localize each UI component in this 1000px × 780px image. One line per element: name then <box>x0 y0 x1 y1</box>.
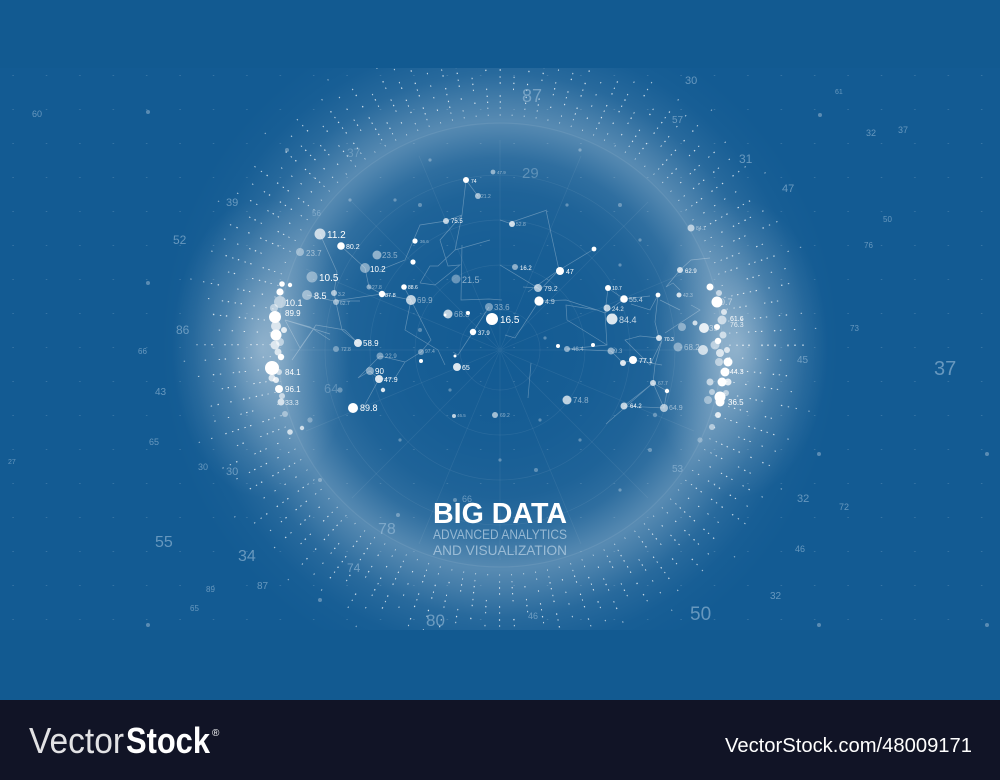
data labels: bright: 10.5 <box>319 273 339 284</box>
brand logo: Vector <box>29 720 124 761</box>
data labels: bright: 10.1 <box>285 298 303 308</box>
data labels: bright: 16.5 <box>500 315 520 326</box>
data labels: bright: 8.5 <box>314 291 327 301</box>
data labels: faint: 22.9 <box>385 354 397 360</box>
data labels: faint: 72.8 <box>341 347 351 353</box>
background numbers: 89 <box>206 585 215 594</box>
right edge cluster <box>704 284 732 430</box>
data labels: faint: 46.4 <box>572 347 584 353</box>
data labels: bright: 36.5 <box>728 398 744 407</box>
data labels: faint: 52.8 <box>516 222 526 228</box>
data nodes: bright <box>337 177 669 413</box>
background numbers: 29 <box>522 165 539 182</box>
data labels: faint: 69.2 <box>500 413 510 419</box>
background numbers: 65 <box>190 604 199 613</box>
data labels: bright: 20.7 <box>715 297 733 307</box>
background numbers: 37 <box>898 125 908 135</box>
background numbers: 43 <box>155 387 167 398</box>
data labels: bright: 70.3 <box>664 337 674 343</box>
data labels: bright: 33.3 <box>285 400 299 407</box>
background numbers: 60 <box>32 109 42 119</box>
footer bar <box>0 700 1000 780</box>
data labels: faint: 84.1 <box>696 226 706 232</box>
scattered faint dots <box>146 110 989 627</box>
background numbers: 66 <box>138 347 147 356</box>
background numbers: 34 <box>238 548 256 565</box>
background numbers: 30 <box>198 462 208 472</box>
background numbers: 50 <box>883 215 892 224</box>
data labels: bright: 4.9 <box>545 299 555 306</box>
data nodes: pale <box>296 170 709 418</box>
background numbers: 45 <box>797 355 809 366</box>
data labels: bright: 16.2 <box>520 266 532 272</box>
data labels: faint: 68.8 <box>454 310 470 319</box>
background numbers: 57 <box>672 115 684 126</box>
data labels: bright: 24.2 <box>612 307 624 313</box>
heading: big data: BIG DATA <box>433 498 567 530</box>
background numbers: 53 <box>672 464 684 475</box>
data labels: bright: 10.2 <box>370 265 386 274</box>
data labels: bright: 90 <box>375 367 384 376</box>
data labels: faint: 62.7 <box>340 301 350 307</box>
background numbers: 56 <box>312 209 321 218</box>
background numbers: 52 <box>173 233 187 247</box>
data labels: bright: 64.2 <box>630 404 642 410</box>
background numbers: 74 <box>347 561 361 575</box>
data labels: faint: 46.5 <box>457 413 466 418</box>
data labels: faint: 97.4 <box>425 349 435 355</box>
data labels: faint <box>306 170 718 419</box>
data labels: bright: 65 <box>462 365 470 372</box>
background numbers: 50 <box>690 604 711 625</box>
background numbers: 65 <box>149 437 159 447</box>
title block <box>433 502 566 555</box>
data labels: faint: 64.9 <box>669 405 683 412</box>
data labels: bright: 61.6 <box>730 316 744 323</box>
background numbers: 37 <box>347 146 361 160</box>
background numbers: 37 <box>934 358 956 380</box>
data labels: faint: 21.5 <box>462 275 480 285</box>
background numbers: 46 <box>528 611 538 621</box>
data labels: faint: 3.2 <box>338 292 345 298</box>
data labels: bright: 62.9 <box>685 269 697 275</box>
data labels: bright: 89.8 <box>360 403 378 413</box>
network links <box>285 180 710 424</box>
background numbers: 32 <box>866 128 876 138</box>
background numbers: 72 <box>839 502 849 512</box>
data labels: bright: 84.4 <box>619 315 637 325</box>
background numbers: 73 <box>850 324 859 333</box>
brand logo: Stock <box>126 720 211 761</box>
data labels: faint: 21.2 <box>481 194 491 200</box>
data labels: faint: 67.7 <box>658 381 668 387</box>
data labels: bright: 47.9 <box>384 377 398 384</box>
data labels: faint: 68.2 <box>684 343 700 352</box>
data labels: bright: 10.7 <box>612 286 622 292</box>
data labels: faint: 33.6 <box>494 303 510 312</box>
data labels: faint: 23.7 <box>306 249 322 258</box>
data labels: bright: 55.4 <box>629 297 643 304</box>
background numbers: 27 <box>8 459 16 466</box>
background numbers: 31 <box>739 152 753 166</box>
background numbers: 55 <box>155 534 173 551</box>
data labels: bright: 58.9 <box>363 339 379 348</box>
background numbers: 30 <box>226 466 238 478</box>
left edge cluster <box>265 281 304 435</box>
background numbers: 47 <box>782 183 794 195</box>
subtitle line 2: AND VISUALIZATION <box>433 542 567 558</box>
data labels: bright: 80.2 <box>346 244 360 251</box>
background numbers: 32 <box>797 493 809 505</box>
data labels: faint: 23.5 <box>382 251 398 260</box>
data labels: faint: 27.8 <box>372 285 382 291</box>
data labels: faint: 36.6 <box>420 239 429 244</box>
data labels: faint: 69.9 <box>417 296 433 305</box>
background numbers: 30 <box>685 75 697 87</box>
data labels: bright <box>285 179 744 413</box>
background numbers <box>8 75 956 630</box>
background numbers: 87 <box>522 86 542 106</box>
data labels: bright: 44.3 <box>730 369 744 376</box>
background numbers: 80 <box>426 611 445 630</box>
background numbers: 61 <box>835 89 843 96</box>
data labels: faint: 47.9 <box>497 170 506 175</box>
data labels: faint: 74.8 <box>573 396 589 405</box>
background numbers: 46 <box>795 544 805 554</box>
brand logo: ® <box>212 728 220 739</box>
data labels: faint: 35 <box>709 324 718 333</box>
background numbers: 66 <box>462 494 472 504</box>
background numbers: 32 <box>770 591 782 602</box>
data labels: bright: 89.9 <box>285 309 301 318</box>
data labels: bright: 76.3 <box>730 322 744 329</box>
data labels: bright: 84.1 <box>285 368 301 377</box>
data labels: bright: 47 <box>566 269 574 276</box>
data labels: bright: 11.2 <box>327 230 346 241</box>
radial dotted rays <box>184 68 816 630</box>
data labels: bright: 77.1 <box>639 358 653 365</box>
background numbers: 64 <box>324 381 338 396</box>
background numbers: 39 <box>226 197 238 209</box>
background numbers: 86 <box>176 323 190 337</box>
data labels: faint: 42.3 <box>683 293 693 299</box>
image id: VectorStock.com/48009171 <box>725 735 972 757</box>
data labels: bright: 74 <box>471 179 477 185</box>
data labels: bright: 37.9 <box>478 331 490 337</box>
artwork panel <box>8 68 989 630</box>
background numbers: 87 <box>257 581 269 592</box>
polar grid <box>290 140 710 560</box>
sphere glow <box>179 68 821 630</box>
data labels: faint: 9.3 <box>614 349 623 355</box>
data labels: bright: 75.5 <box>451 219 463 225</box>
background numbers: 76 <box>864 241 873 250</box>
subtitle line 1: ADVANCED ANALYTICS <box>433 526 567 542</box>
data labels: bright: 88.6 <box>408 285 418 291</box>
data labels: bright: 87.8 <box>385 293 396 299</box>
data labels: bright: 79.2 <box>544 286 558 293</box>
background numbers: 78 <box>378 521 396 538</box>
brand logo <box>29 720 220 761</box>
data labels: bright: 96.1 <box>285 385 301 394</box>
